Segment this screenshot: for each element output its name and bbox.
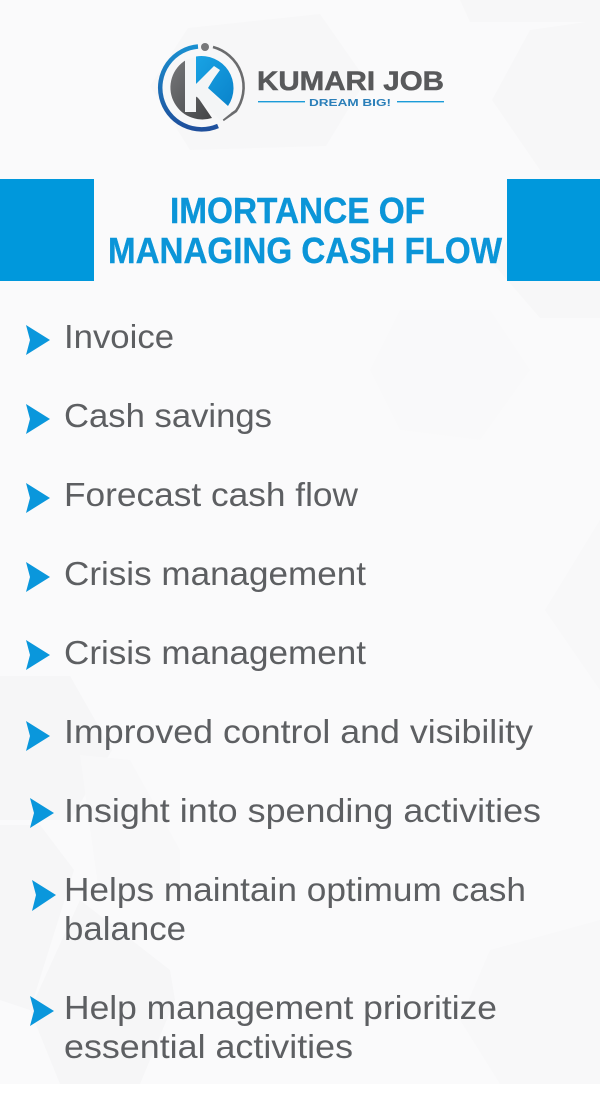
arrow icon bbox=[30, 798, 54, 828]
list item: Help management prioritize essential activities: essential activities bbox=[64, 1028, 353, 1065]
list item: Helps maintain optimum cash balance: Helps maintain optimum cash bbox=[64, 871, 526, 908]
list item: Helps maintain optimum cash balance: balance bbox=[64, 910, 186, 947]
logo disc grey part bbox=[170, 60, 212, 119]
title bbox=[108, 190, 502, 271]
logo disc blue part bbox=[196, 56, 234, 106]
list item: Invoice: Invoice bbox=[64, 318, 174, 355]
logo K letter bbox=[185, 57, 231, 121]
list item: Helps maintain optimum cash balance bbox=[32, 871, 526, 947]
logo mark bbox=[160, 43, 244, 129]
arrow icon bbox=[26, 404, 50, 434]
list item: Cash savings: Cash savings bbox=[64, 397, 272, 434]
list item: Crisis management: Crisis management bbox=[64, 555, 366, 592]
arrow icon bbox=[26, 483, 50, 513]
arrow icon bbox=[30, 996, 54, 1026]
right title block bbox=[507, 179, 600, 281]
left title block bbox=[0, 179, 94, 281]
list item: Insight into spending activities: Insight into spending activities bbox=[64, 792, 541, 829]
logo outer ring grey bbox=[213, 47, 244, 120]
logo tagline: DREAM BIG! bbox=[309, 97, 391, 109]
arrow icon bbox=[26, 562, 50, 592]
title: MANAGING CASH FLOW bbox=[108, 230, 502, 271]
logo dot bbox=[201, 43, 209, 51]
title: IMORTANCE OF bbox=[170, 190, 425, 231]
logo bbox=[160, 43, 444, 129]
list item: Help management prioritize essential activities: Help management prioritize bbox=[64, 989, 497, 1026]
list item: Improved control and visibility: Improved control and visibility bbox=[64, 713, 534, 750]
arrow icon bbox=[32, 880, 56, 911]
list item: Crisis management repeated: Crisis management bbox=[64, 634, 366, 671]
arrow icon bbox=[26, 721, 50, 751]
arrow icon bbox=[26, 325, 50, 355]
arrow icon bbox=[26, 640, 50, 670]
logo outer ring blue bbox=[160, 46, 218, 129]
list item: Help management prioritize essential activities bbox=[30, 989, 497, 1065]
logo wordmark: KUMARI JOB bbox=[257, 66, 444, 96]
list item: Forecast cash flow: Forecast cash flow bbox=[64, 476, 358, 513]
